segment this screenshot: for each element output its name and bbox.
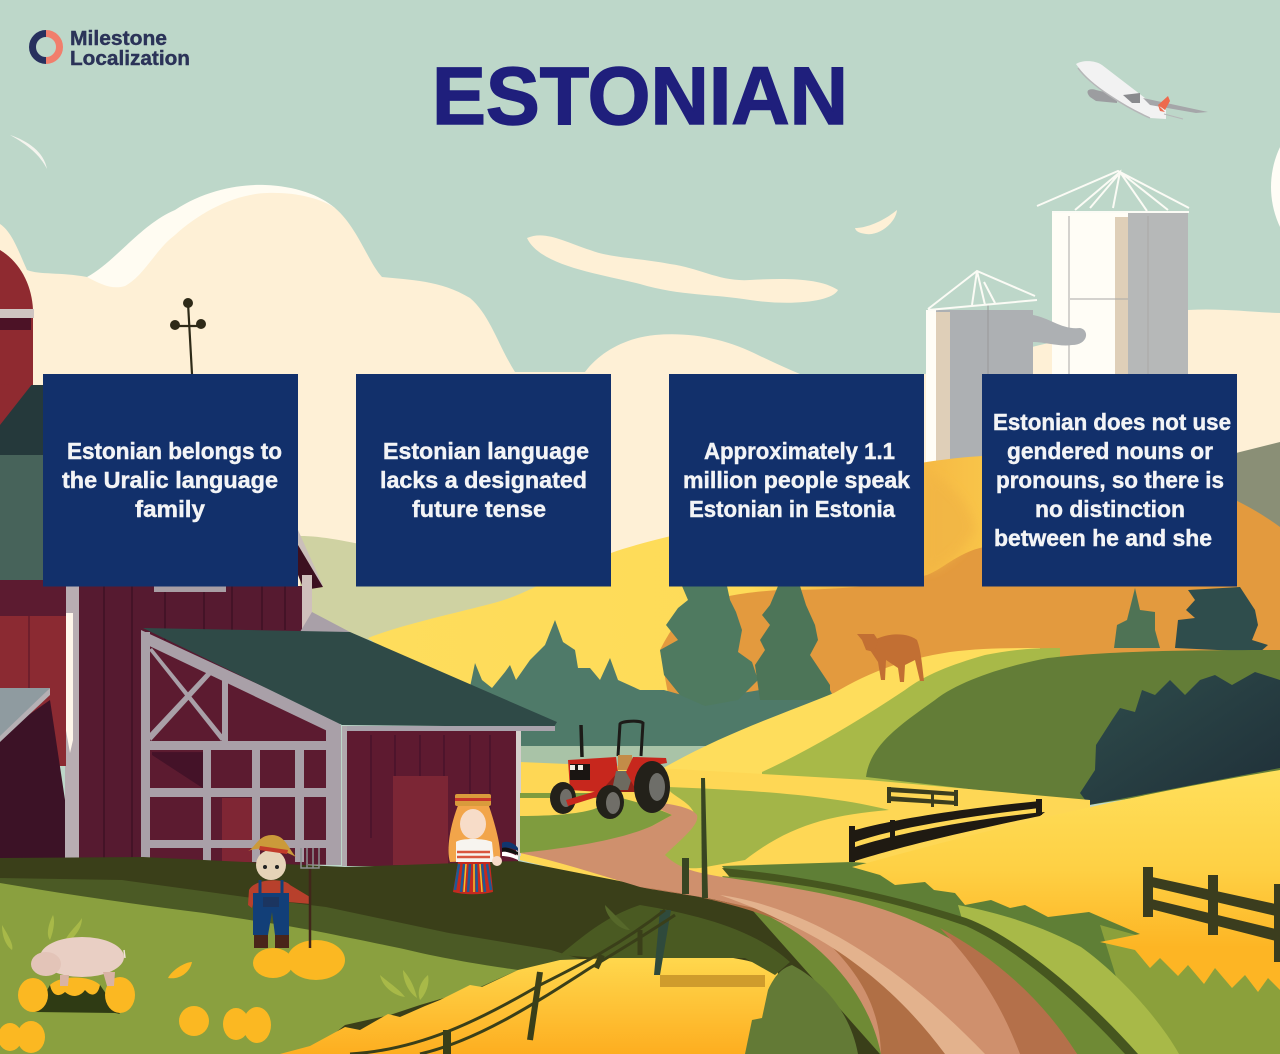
- card 3: [669, 374, 924, 586]
- main barn: [65, 530, 350, 866]
- distant hills: [300, 442, 1280, 760]
- logo text: Milestone: [70, 28, 167, 50]
- title: ESTONIAN: [432, 51, 848, 142]
- right fence: [1143, 867, 1280, 962]
- far fence: [887, 787, 958, 807]
- bottom yellow field: [280, 954, 778, 1054]
- card 1: Estonian belongs to: [67, 438, 282, 464]
- tractor: [550, 721, 670, 819]
- card 2: Estonian language: [383, 438, 589, 464]
- card 3: million people speak: [683, 467, 910, 493]
- crescent bird stroke: [10, 135, 47, 169]
- green lawn: [0, 883, 518, 1054]
- pig: [31, 937, 125, 986]
- tall silo: [1037, 171, 1189, 472]
- grass under tractor: [520, 793, 672, 853]
- weather vane: [170, 298, 206, 374]
- card 1: the Uralic language: [62, 467, 278, 493]
- meadow green patch: [650, 787, 889, 868]
- ground shadow: [0, 857, 885, 1054]
- lean-to roof: [143, 628, 557, 727]
- card 4: pronouns, so there is: [996, 467, 1224, 493]
- card 2: lacks a designated: [380, 467, 587, 493]
- lean-to walls: [143, 635, 340, 865]
- farmer: [248, 835, 319, 948]
- yellow meadow behind the road: [520, 762, 1090, 890]
- silos: [926, 171, 1189, 472]
- fence posts by the road: [654, 778, 708, 975]
- foreground fence: [350, 910, 675, 1054]
- logo: Localization: [70, 48, 190, 70]
- rolling hills: [660, 648, 1280, 805]
- card 4: Estonian does not use: [993, 409, 1231, 435]
- grey cloud shadow: [1033, 315, 1086, 345]
- cow: [857, 634, 924, 682]
- airplane: [1076, 61, 1208, 119]
- short silo: [926, 271, 1037, 470]
- lower field shade: [660, 975, 765, 987]
- treeline: [470, 586, 1268, 770]
- lawn shading: [0, 878, 600, 1000]
- card 3: Approximately 1.1: [704, 438, 895, 464]
- left shed: [0, 688, 65, 860]
- road: [520, 800, 1077, 1054]
- card 4: between he and she: [994, 525, 1212, 551]
- pale leaves: [2, 905, 630, 1000]
- card 2: future tense: [412, 496, 546, 522]
- card 4: [982, 374, 1237, 586]
- right barn wall: [342, 726, 555, 866]
- card 4: gendered nouns or: [1007, 438, 1213, 464]
- middle fence: [849, 799, 1045, 862]
- logo mark: [32, 34, 60, 60]
- dark brush above the yellow field: [560, 905, 790, 975]
- right golden field: [852, 770, 1280, 992]
- sun at right edge: [1271, 94, 1280, 280]
- card 1: [43, 374, 298, 586]
- right green slope: [722, 862, 1280, 1054]
- card 3: Estonian in Estonia: [689, 496, 895, 522]
- logo: [32, 28, 190, 70]
- card 2: [356, 374, 611, 586]
- girl in folk costume: [448, 794, 518, 894]
- cloud bank: [0, 185, 1280, 640]
- lean-to framing: [141, 630, 341, 865]
- small clouds: [527, 210, 897, 303]
- lean-to door patch: [222, 798, 252, 862]
- far barn wall and lean-to: [0, 250, 557, 866]
- bottom green patch: [745, 965, 858, 1054]
- pumpkins: [0, 940, 345, 1053]
- card 1: family: [135, 496, 205, 522]
- left silo: [0, 250, 66, 766]
- card 4: no distinction: [1035, 496, 1185, 522]
